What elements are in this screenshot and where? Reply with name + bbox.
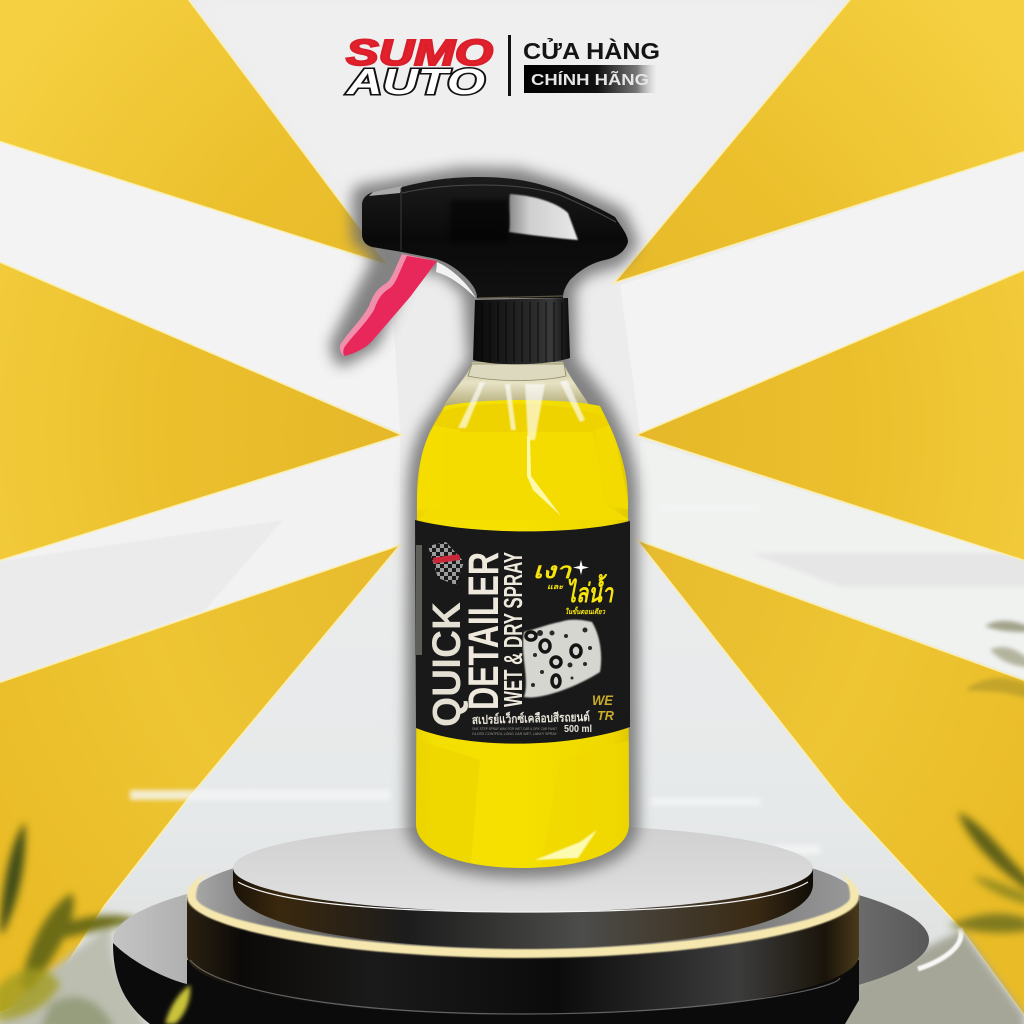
- bottle glass shoulder: [430, 362, 605, 432]
- logo: SUMO: SUMO: [346, 32, 493, 73]
- label: volume: 500 ml: [564, 724, 592, 735]
- label: small print: ONE STEP SPRAY WAX FOR WET CAR & DRY CAR PAINT: [472, 726, 557, 731]
- bottle yellow liquid: [410, 392, 635, 872]
- label: product name DETAILER: DETAILER: [460, 552, 508, 710]
- bottle base highlight: [535, 830, 597, 860]
- logo: genuine badge: [524, 65, 657, 93]
- label: Thai shine heading: [533, 558, 614, 616]
- brand logo: [346, 32, 660, 102]
- label: small print: [472, 726, 557, 736]
- label: Thai shine heading: ในขั้นตอนเดียว: [565, 606, 606, 616]
- logo: divider: [508, 35, 511, 96]
- bottle: [340, 177, 635, 872]
- label: Thai product description: สเปรย์แว็กซ์เคลือบสีรถยนต์: [472, 709, 590, 727]
- bottle centre highlight: [527, 436, 561, 516]
- blurred plants: right: [948, 812, 1024, 933]
- label: WET logo badge: TR: [597, 708, 615, 723]
- floor lower right: [830, 930, 1024, 1024]
- bottle neck ring: [468, 364, 566, 380]
- bottle shadow halo: [340, 177, 629, 868]
- sprayer collar: [473, 298, 570, 364]
- product label: [415, 520, 630, 744]
- logo: genuine badge: CHÍNH HÃNG: [531, 71, 649, 89]
- sprayer white inner shape: [436, 262, 476, 298]
- label: checkered flag logo: [428, 542, 464, 585]
- label: side barcode strip: [416, 545, 422, 655]
- plinth base tier: [113, 860, 961, 1024]
- logo: AUTO: AUTO: [346, 61, 485, 102]
- label: WET logo badge: [592, 692, 615, 723]
- plinth gold ring: [187, 871, 859, 958]
- lower wall reflections: [130, 505, 820, 854]
- floor lower left: [0, 925, 150, 1024]
- sprayer head: [362, 177, 628, 298]
- sprayer gloss highlight: [509, 194, 578, 240]
- label: Thai shine heading: เงา: [533, 558, 573, 583]
- plinth top disc: [233, 824, 813, 948]
- label: subtitle: WET & DRY SPRAY: [498, 552, 528, 707]
- bottle glass reflections: [458, 380, 585, 440]
- label: WET logo badge: WE: [592, 692, 614, 708]
- plinth: [113, 824, 961, 1024]
- sprayer trigger: [340, 254, 437, 356]
- label: Thai shine heading: และ: [547, 584, 565, 591]
- blurred plants: lower left: [0, 822, 140, 1024]
- plinth middle tier: [187, 839, 859, 1015]
- logo: store tagline: CỬA HÀNG: [523, 36, 660, 64]
- label: water droplets photo: [523, 620, 601, 697]
- blurred plants: upper right sprigs: [965, 621, 1024, 700]
- label: Thai shine heading: ไล่น้ำ: [566, 573, 614, 608]
- label: product name QUICK: QUICK: [425, 602, 469, 727]
- background light rays: [0, 0, 1024, 682]
- label: small print: GLOSS CONTROL LONG CAR WET, LAKKY SPRAY: [472, 731, 557, 736]
- label: sparkle: [573, 560, 589, 575]
